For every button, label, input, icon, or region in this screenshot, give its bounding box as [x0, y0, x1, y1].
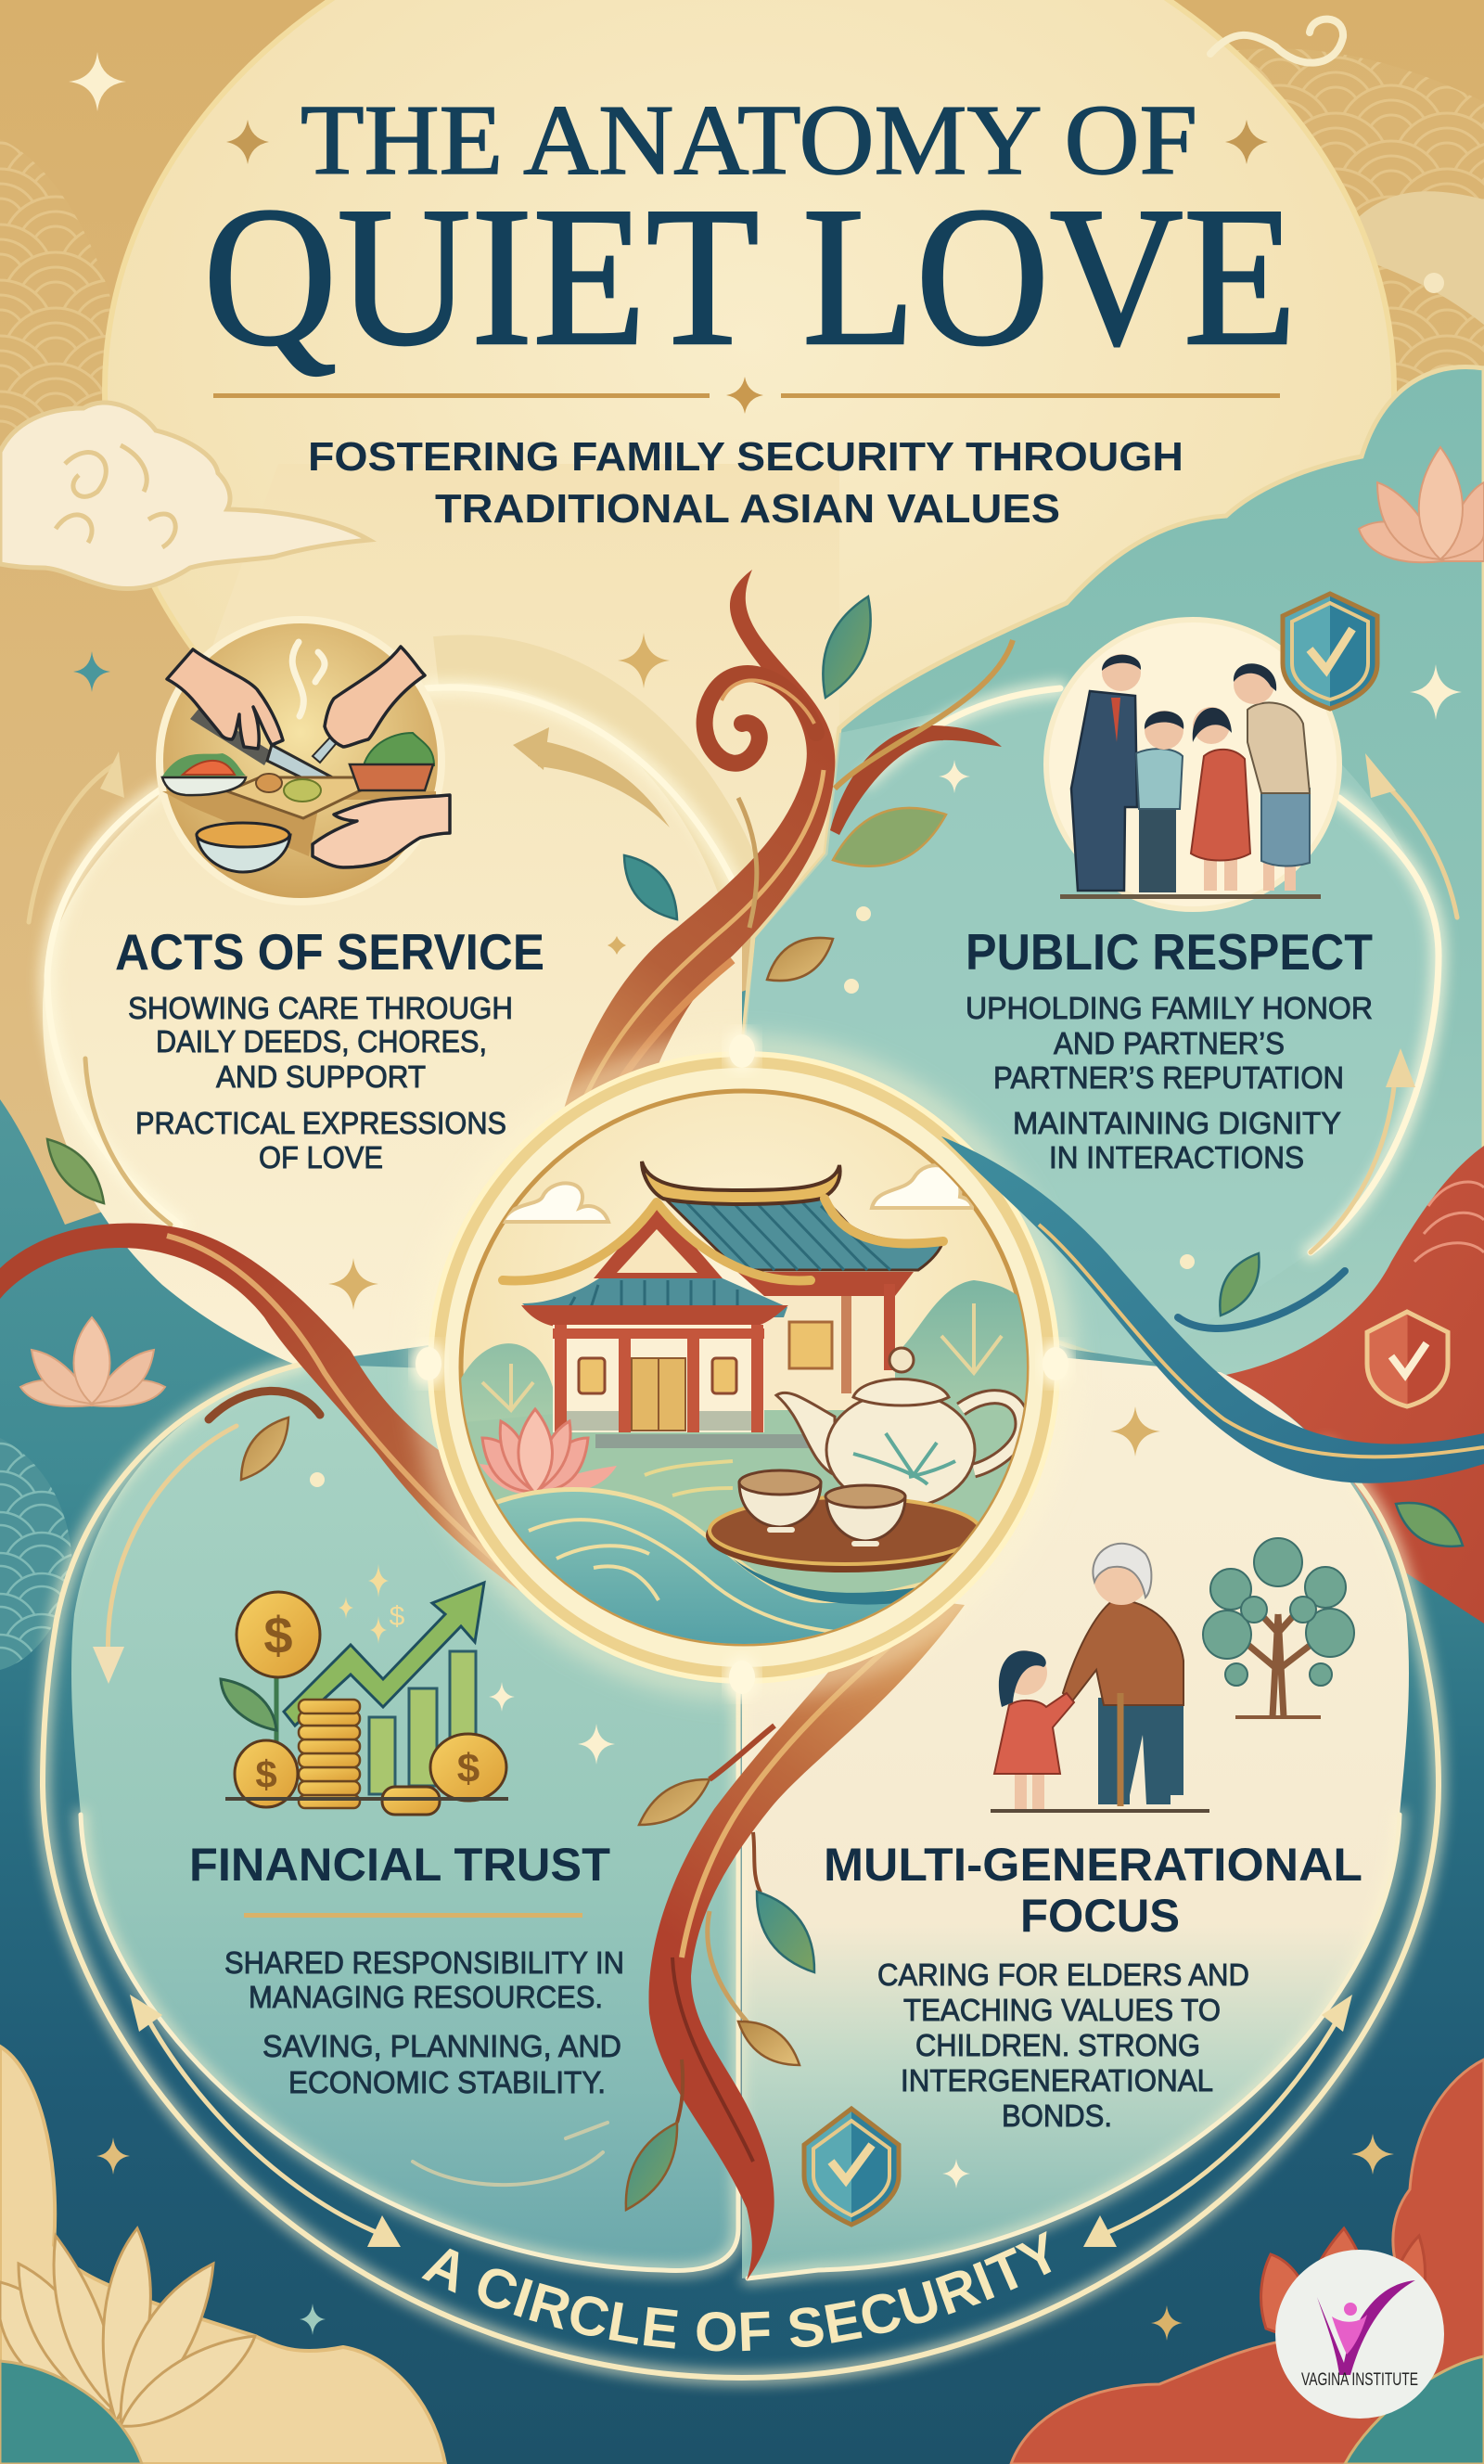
right hand — [325, 647, 425, 747]
knife handle — [190, 708, 272, 765]
panel text: multi-generational focus: FOCUS — [1020, 1890, 1180, 1942]
financial trust lobe fill — [71, 1364, 738, 2270]
panel text: acts of service — [115, 923, 544, 1174]
panel text: acts of service: OF LOVE — [259, 1140, 383, 1174]
panel text: financial trust: SHARED RESPONSIBILITY IN — [224, 1945, 624, 1980]
arrow: acts inner left — [513, 727, 670, 828]
bottom-right flora — [1011, 2060, 1484, 2464]
lower outer ring — [43, 1364, 1439, 2378]
panel text: acts of service: DAILY DEEDS, CHORES, — [156, 1024, 487, 1059]
panel text: acts of service: AND SUPPORT — [216, 1059, 426, 1094]
central ring — [412, 1029, 1072, 1700]
logo badge — [1275, 2250, 1444, 2419]
panel text: acts of service: ACTS OF SERVICE — [115, 923, 544, 981]
sparkles and dollar — [339, 1564, 405, 1644]
left bowl — [162, 753, 246, 781]
arrow: public upper — [1365, 753, 1457, 918]
steam — [292, 642, 325, 716]
central scene: home and tea — [445, 1161, 1048, 1661]
leaf: right edge — [1396, 1503, 1463, 1546]
branch to leaf — [209, 1391, 320, 1419]
ground — [991, 1809, 1209, 1813]
right coin — [430, 1734, 506, 1801]
back roof — [665, 1199, 943, 1270]
lotus — [480, 1409, 617, 1495]
panel text: acts of service: SHOWING CARE THROUGH — [128, 991, 513, 1025]
panel text: public respect: UPHOLDING FAMILY HONOR — [966, 991, 1373, 1025]
icon: multi-generational family and tree — [991, 1538, 1354, 1813]
leaves — [47, 597, 1463, 2210]
red right region — [1210, 1146, 1484, 1623]
icon: financial growth — [221, 1564, 508, 1815]
big cream title ellipse — [105, 0, 1394, 903]
coin stack — [299, 1700, 360, 1808]
father — [1071, 654, 1141, 891]
leaf: left — [47, 1139, 104, 1203]
panel text: financial trust: FINANCIAL TRUST — [189, 1839, 610, 1891]
teapot — [776, 1348, 1022, 1508]
top-right swirl — [1210, 19, 1343, 63]
gable — [594, 1202, 723, 1278]
icon: shield top right — [1283, 594, 1377, 709]
title heading — [203, 85, 1297, 387]
lotus: left — [20, 1317, 165, 1406]
panel text: public respect: PARTNER’S REPUTATION — [993, 1060, 1344, 1095]
thin brown branch — [753, 1832, 761, 1893]
elder — [1063, 1544, 1183, 1806]
bottom-left flora — [0, 2047, 445, 2464]
teal leaf — [0, 2361, 142, 2464]
teal leaf — [1345, 2356, 1484, 2464]
arrow: lower right double — [1083, 1995, 1352, 2247]
cream cloud — [0, 2047, 445, 2464]
mother — [1234, 663, 1310, 891]
panel text: acts of service: PRACTICAL EXPRESSIONS — [135, 1106, 506, 1140]
title heading: QUIET LOVE — [203, 165, 1297, 387]
small coins — [382, 1787, 440, 1815]
icon: shield red — [1367, 1312, 1448, 1406]
leaf: lower gold 1 — [639, 1779, 710, 1825]
red pattern — [1414, 1182, 1484, 1262]
public ring — [867, 688, 1439, 1252]
ridge — [642, 1161, 840, 1204]
leaf: right branch — [833, 808, 946, 866]
vine: left — [0, 1224, 547, 1610]
icon: public respect family — [1046, 620, 1339, 909]
curved caption: A CIRCLE OF SECURITY — [421, 2231, 1052, 2351]
panel text: public respect: AND PARTNER’S — [1054, 1026, 1285, 1060]
small knife — [313, 726, 345, 763]
beam — [521, 1305, 788, 1327]
panel text: multi-generational focus: BONDS. — [1002, 2098, 1112, 2133]
girl — [994, 1650, 1074, 1809]
decorative glow rings — [43, 687, 1439, 2378]
multi-generational lobe fill — [742, 1345, 1409, 2278]
ground — [1060, 894, 1321, 899]
acts of service lobe — [43, 464, 839, 1392]
leaf: blue vine — [1220, 1253, 1259, 1315]
subtitle: FOSTERING FAMILY SECURITY THROUGH — [308, 434, 1183, 480]
arrow: acts outer up — [29, 751, 124, 922]
glow nodes — [412, 1029, 1072, 1700]
thin gold branch — [708, 1911, 748, 2022]
panel text: multi-generational focus: TEACHING VALUES TO — [903, 1993, 1221, 2027]
icon: financial growth: $ — [255, 1752, 277, 1796]
acts ring — [47, 687, 738, 1225]
icon: acts of service cooking — [160, 620, 450, 902]
roof tile lines — [686, 1202, 890, 1270]
panel text: multi-generational focus: CHILDREN. STRONG — [915, 2028, 1200, 2062]
arc: acts lower — [85, 1059, 171, 1225]
subtitle: TRADITIONAL ASIAN VALUES — [435, 486, 1060, 532]
top-right gold wave pattern — [1196, 48, 1484, 390]
panel text: financial trust: ECONOMIC STABILITY. — [288, 2065, 606, 2099]
stem and leaves — [275, 1676, 278, 1749]
top-left gold wave pattern — [0, 139, 130, 529]
leaf: gold upper — [767, 938, 833, 981]
vine hook — [705, 674, 816, 764]
hills — [445, 1280, 1048, 1429]
clouds — [503, 1165, 972, 1222]
leaf: top vine — [823, 597, 871, 698]
food on board — [256, 774, 282, 792]
red lotus — [1261, 2228, 1426, 2356]
branch to gold leaf — [710, 1726, 774, 1779]
lower hand — [313, 795, 450, 867]
big coin — [237, 1592, 320, 1677]
arrow: lower left double — [130, 1995, 401, 2247]
leaf: financial branch — [241, 1418, 288, 1480]
base line — [225, 1797, 508, 1801]
panel text: financial trust — [189, 1839, 624, 2099]
lower roof — [522, 1278, 787, 1317]
pot with greens — [364, 733, 434, 765]
panel text: public respect: IN INTERACTIONS — [1049, 1140, 1304, 1174]
acts inner darker band — [436, 659, 748, 905]
front wall — [553, 1325, 764, 1432]
daughter — [1191, 707, 1250, 891]
back building — [738, 1272, 914, 1393]
thin green branch — [677, 2060, 683, 2123]
title divider — [213, 377, 1280, 414]
bars — [369, 1717, 395, 1794]
ground — [445, 1410, 1039, 1651]
leaf: lower teal — [757, 1892, 814, 1972]
dark water under tray — [733, 1559, 1002, 1605]
panel text: multi-generational focus — [824, 1839, 1362, 2133]
left teal wave pattern — [0, 1438, 72, 1670]
son — [1136, 711, 1183, 892]
panel text: public respect: MAINTAINING DIGNITY — [1013, 1106, 1341, 1140]
table — [162, 791, 436, 856]
icon: financial growth: $ — [263, 1606, 293, 1664]
vine thin branch — [835, 640, 1013, 789]
knife blade — [267, 745, 350, 787]
sparkles and dollar: $ — [390, 1601, 405, 1632]
lower band — [43, 1299, 1439, 2378]
vine thin lower branch — [738, 798, 757, 928]
left hand — [167, 649, 283, 749]
arrow: financial down — [93, 1426, 237, 1684]
water — [454, 1490, 1039, 1661]
cloud: top left — [0, 403, 369, 589]
leaf: lower gold 2 — [738, 2021, 800, 2065]
lower inner ring — [81, 1679, 1400, 2278]
panel text: financial trust: MANAGING RESOURCES. — [249, 1980, 603, 2014]
upper right teal region — [742, 367, 1484, 1447]
logo badge: VAGINA INSTITUTE — [1301, 2370, 1418, 2390]
cycle arrows — [29, 727, 1457, 2247]
panel text: financial trust: SAVING, PLANNING, AND — [262, 2029, 621, 2063]
vine: lower — [649, 1596, 965, 2280]
lower bowl — [197, 835, 290, 872]
title heading: THE ANATOMY OF — [301, 85, 1197, 196]
tray — [706, 1497, 984, 1572]
small swoosh — [413, 2123, 608, 2185]
board — [227, 777, 365, 818]
lotus: top right — [1359, 447, 1484, 562]
step — [595, 1434, 809, 1448]
panel text: public respect — [966, 923, 1373, 1174]
panel text: multi-generational focus: MULTI-GENERATIONAL — [824, 1839, 1362, 1891]
public respect lobe — [742, 672, 1441, 1373]
red cloud — [1011, 2060, 1484, 2464]
vine: upper — [547, 570, 1013, 1197]
panel text: multi-generational focus: CARING FOR ELDERS AND — [877, 1957, 1249, 1992]
icon: financial growth: $ — [457, 1746, 480, 1791]
panel text: multi-generational focus: INTERGENERATIONAL — [901, 2063, 1213, 2098]
right gold hill — [1345, 191, 1484, 325]
cream lotus — [0, 2228, 255, 2426]
gold gable eaves — [503, 1199, 943, 1280]
tea cups — [739, 1470, 905, 1546]
arrow: public lower — [1311, 1048, 1415, 1252]
subtitle — [308, 434, 1183, 532]
tree — [1203, 1538, 1354, 1719]
growth arrow — [284, 1583, 484, 1726]
gold upper region — [0, 0, 1484, 1225]
blue branch — [1178, 1271, 1345, 1328]
panel text: public respect: PUBLIC RESPECT — [966, 923, 1373, 981]
leaf: teal — [624, 855, 677, 919]
left coin — [235, 1740, 298, 1807]
icon: shield lower — [804, 2109, 899, 2225]
vine: right blue — [941, 1136, 1484, 1483]
leaf: lower green — [626, 2123, 677, 2210]
vine branch right — [830, 725, 1002, 835]
